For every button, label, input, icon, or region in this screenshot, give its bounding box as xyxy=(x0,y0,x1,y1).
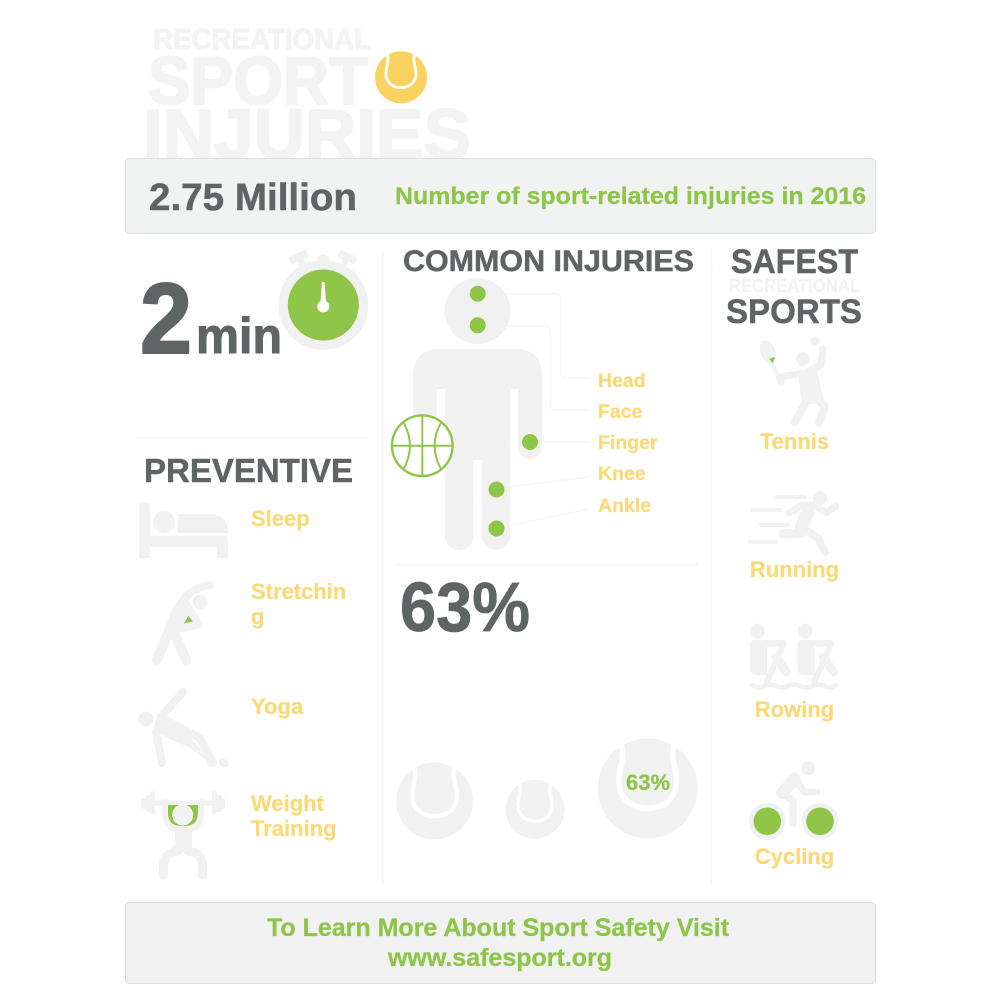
stat: 2 min: min xyxy=(196,308,282,364)
icon: runner xyxy=(750,491,836,552)
label: stretching: g xyxy=(251,604,264,629)
label: sleep: Sleep xyxy=(251,506,310,531)
heading: common injuries: COMMON INJURIES xyxy=(403,245,694,278)
leader lines xyxy=(506,294,589,526)
panel: footer call to action: To Learn More About Sport Safety Visit xyxy=(267,914,730,942)
total injuries number: 2.75 Million xyxy=(149,177,357,219)
chart: body diagram xyxy=(392,278,589,550)
icon: weight training figure xyxy=(141,791,225,875)
heading: safest sports: RECREATIONAL xyxy=(729,276,860,296)
panel: footer call to action: www.safesport.org xyxy=(387,944,612,972)
label: weight training: Training xyxy=(251,816,337,841)
heading: safest sports: SPORTS xyxy=(726,293,862,331)
injury labels xyxy=(598,370,658,517)
injury labels: Finger xyxy=(598,432,658,454)
stat: 2 min xyxy=(140,263,282,375)
icon: cyclist xyxy=(749,761,838,840)
injury markers xyxy=(470,286,538,536)
icon: stopwatch xyxy=(278,249,368,350)
icon: gray tennis ball small center xyxy=(506,780,564,839)
icon: gray tennis ball with percentage: 63% xyxy=(626,770,670,795)
label: stretching: Stretchin xyxy=(251,579,346,604)
panel: footer call to action xyxy=(126,902,876,984)
label: rowing: Rowing xyxy=(755,697,834,722)
label: tennis: Tennis xyxy=(760,429,829,454)
label: running: Running xyxy=(750,557,839,582)
icon: yoga figure xyxy=(138,692,230,769)
icon: stretching figure xyxy=(157,585,210,660)
icon: basketball xyxy=(392,415,453,476)
icon: tennis player xyxy=(757,336,825,423)
heading: safest sports: SAFEST xyxy=(731,243,858,281)
title xyxy=(143,24,471,173)
heading: safest sports xyxy=(726,243,862,331)
label: weight training: Weight xyxy=(251,791,325,816)
banner caption: Number of sport-related injuries in 2016 xyxy=(395,183,866,210)
icon: bed xyxy=(139,503,228,558)
stat: 2 min: 2 xyxy=(140,263,192,375)
title: RECREATIONAL xyxy=(153,24,371,56)
heading: preventive: PREVENTIVE xyxy=(144,452,353,489)
stat: 63 percent: 63% xyxy=(400,568,530,646)
title: SPORT xyxy=(148,43,368,119)
injury labels: Ankle xyxy=(598,495,651,517)
injury labels: Face xyxy=(598,401,643,423)
title: INJURIES xyxy=(143,95,471,173)
label: cycling: Cycling xyxy=(755,844,834,869)
icon: rowers xyxy=(750,624,836,688)
icon: gray tennis ball small left xyxy=(396,762,473,840)
body silhouette xyxy=(413,278,542,550)
icon: gray tennis ball with percentage xyxy=(598,738,698,838)
icon: yellow tennis ball xyxy=(375,51,427,103)
label: yoga: Yoga xyxy=(251,694,304,719)
injury labels: Head xyxy=(598,370,646,392)
panel: total injuries banner xyxy=(126,158,876,234)
injury labels: Knee xyxy=(598,463,646,485)
